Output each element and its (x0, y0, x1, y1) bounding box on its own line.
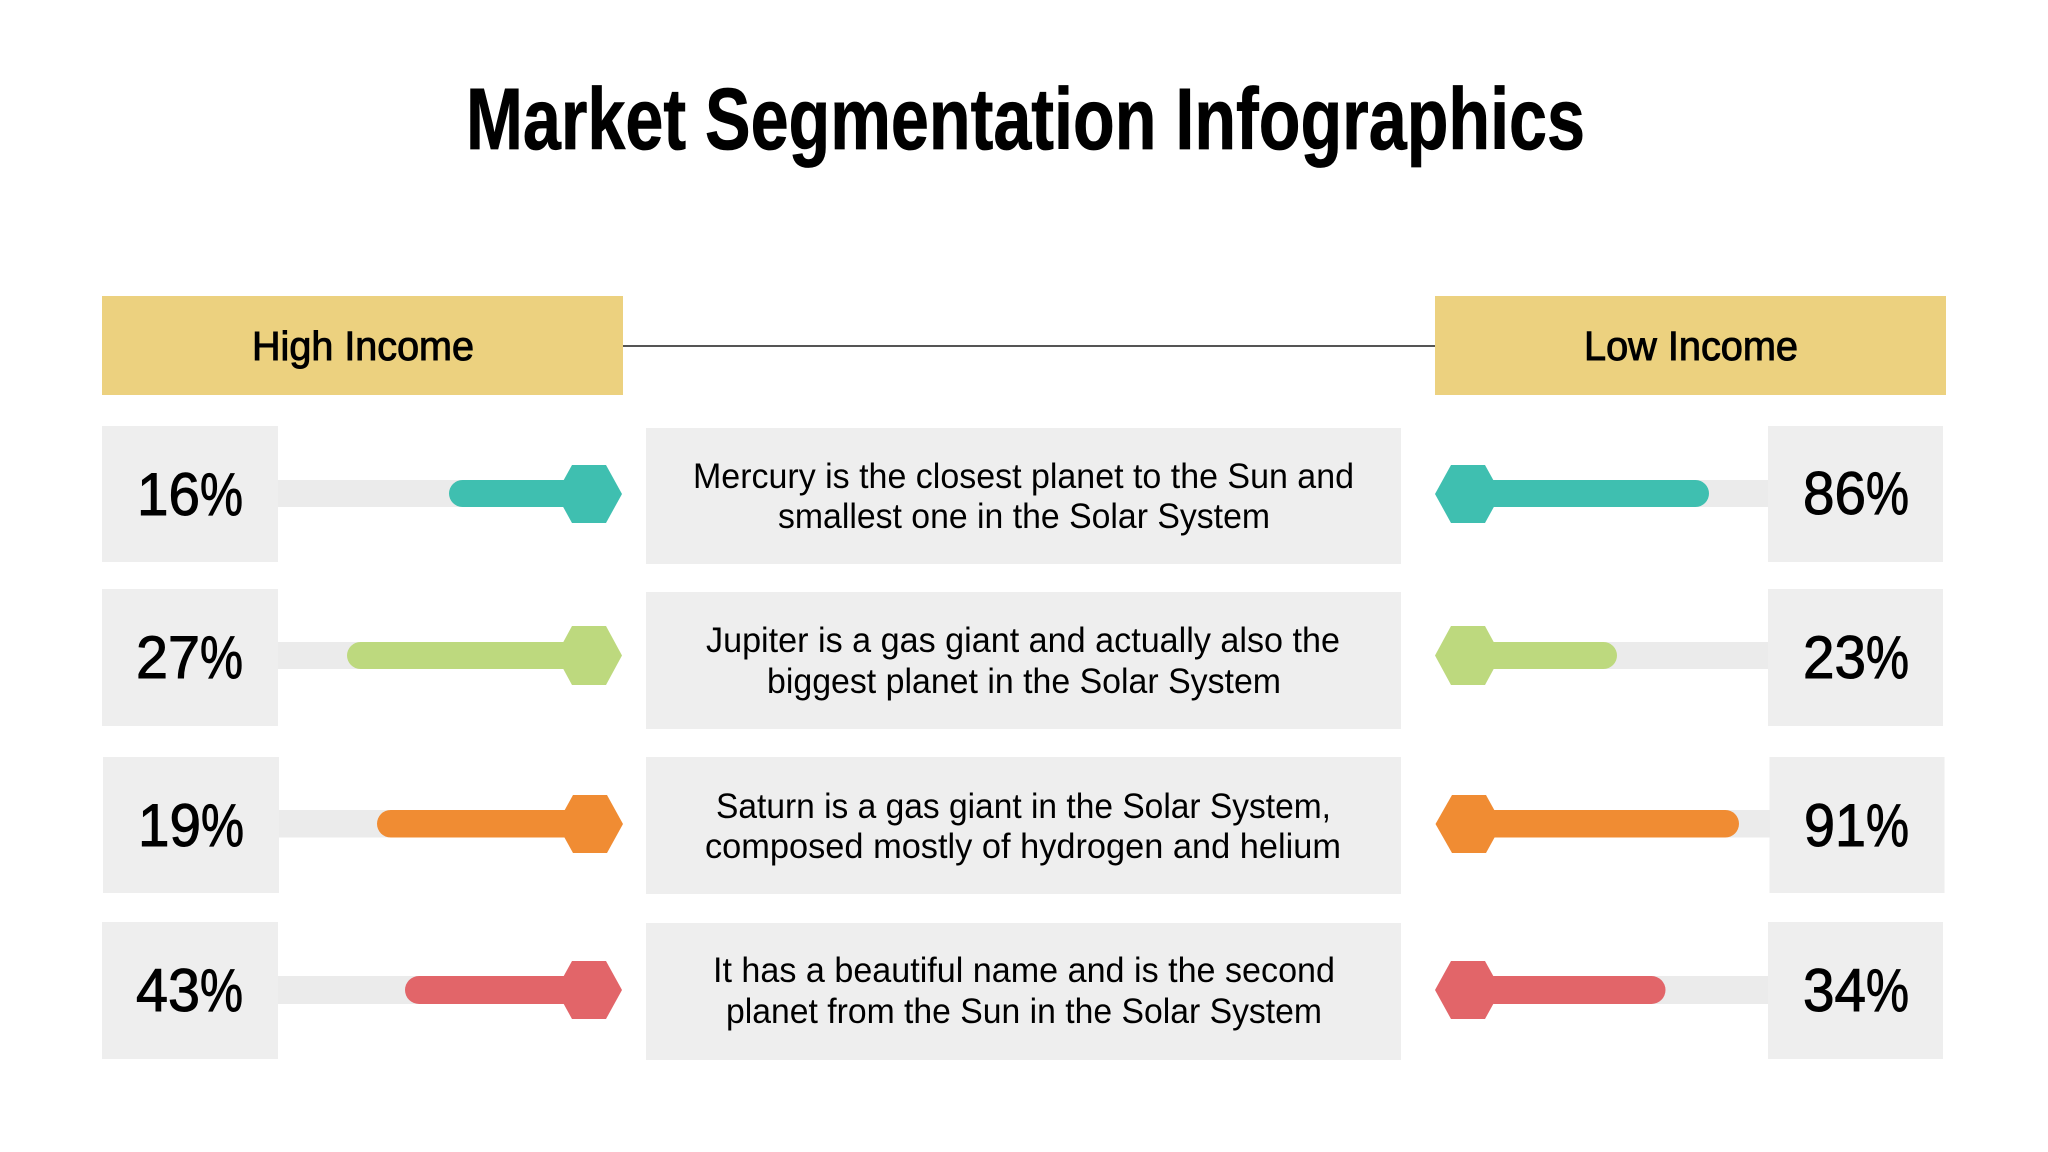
row 2: high income 27% (102, 589, 622, 726)
header: Low Income: Low Income (1584, 323, 1798, 369)
row 4: description: It has a beautiful name and is the second (713, 950, 1335, 990)
row 4: high income 43% (102, 922, 622, 1059)
row 3: low income 91% (1436, 757, 1944, 893)
header: High Income (102, 296, 623, 395)
row 3: description: composed mostly of hydrogen and helium (705, 826, 1341, 866)
row 1: description: smallest one in the Solar System (778, 496, 1270, 536)
header: Low Income (1435, 296, 1946, 395)
row 2: low income 23%: 23% (1803, 624, 1909, 691)
row 1: high income 16% (102, 426, 622, 562)
row 3: low income 91%: 91% (1804, 792, 1909, 859)
row 1: high income 16%: 16% (137, 461, 243, 528)
row 4: high income 43%: 43% (136, 957, 243, 1024)
row 4: description (646, 923, 1401, 1060)
row 1: description (646, 428, 1401, 564)
row 3: high income 19%: 19% (138, 792, 244, 859)
row 3: high income 19% (103, 757, 623, 893)
row 2: description: Jupiter is a gas giant and actually also the (706, 620, 1340, 660)
row 2: description: biggest planet in the Solar System (767, 661, 1281, 701)
title: Market Segmentation Infographics (466, 71, 1585, 168)
header: High Income: High Income (252, 323, 474, 369)
row 3: description: Saturn is a gas giant in the Solar System, (716, 786, 1331, 826)
row 3: description (646, 757, 1401, 894)
row 2: low income 23% (1435, 589, 1943, 726)
row 4: description: planet from the Sun in the Solar System (726, 991, 1322, 1031)
row 2: high income 27%: 27% (136, 624, 243, 691)
row 4: low income 34%: 34% (1803, 957, 1909, 1024)
connector line between headers (623, 345, 1435, 347)
row 1: low income 86%: 86% (1803, 460, 1909, 527)
row 4: low income 34% (1435, 922, 1943, 1059)
row 1: low income 86% (1435, 426, 1943, 562)
row 2: description (646, 592, 1401, 729)
row 1: description: Mercury is the closest planet to the Sun and (693, 456, 1354, 496)
